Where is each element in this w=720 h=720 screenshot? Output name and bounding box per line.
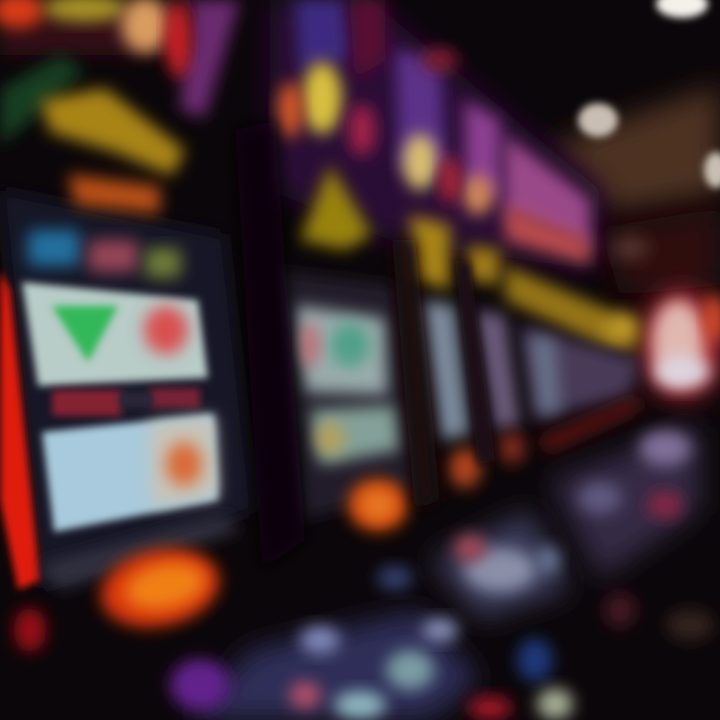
right side lit sign	[642, 291, 720, 399]
dark cabinet pillars	[235, 120, 495, 570]
machine 3 and receding row	[410, 215, 640, 488]
yellow topper light	[40, 88, 185, 214]
top-left corner lights	[0, 0, 190, 145]
orange button	[93, 538, 227, 638]
machine tops: purple and magenta band receding	[180, 0, 600, 270]
upper reel screen	[22, 282, 208, 386]
foreground: blurred stools and lower machines	[170, 425, 714, 720]
base panel	[40, 515, 240, 590]
top icon row	[28, 230, 181, 278]
machine 1: near left slot machine	[0, 88, 255, 652]
lower reel screen	[42, 414, 218, 532]
background: ceiling and far wall	[550, 0, 720, 295]
red side strip	[0, 270, 40, 590]
red divider	[52, 388, 200, 416]
machine 2	[275, 165, 415, 531]
